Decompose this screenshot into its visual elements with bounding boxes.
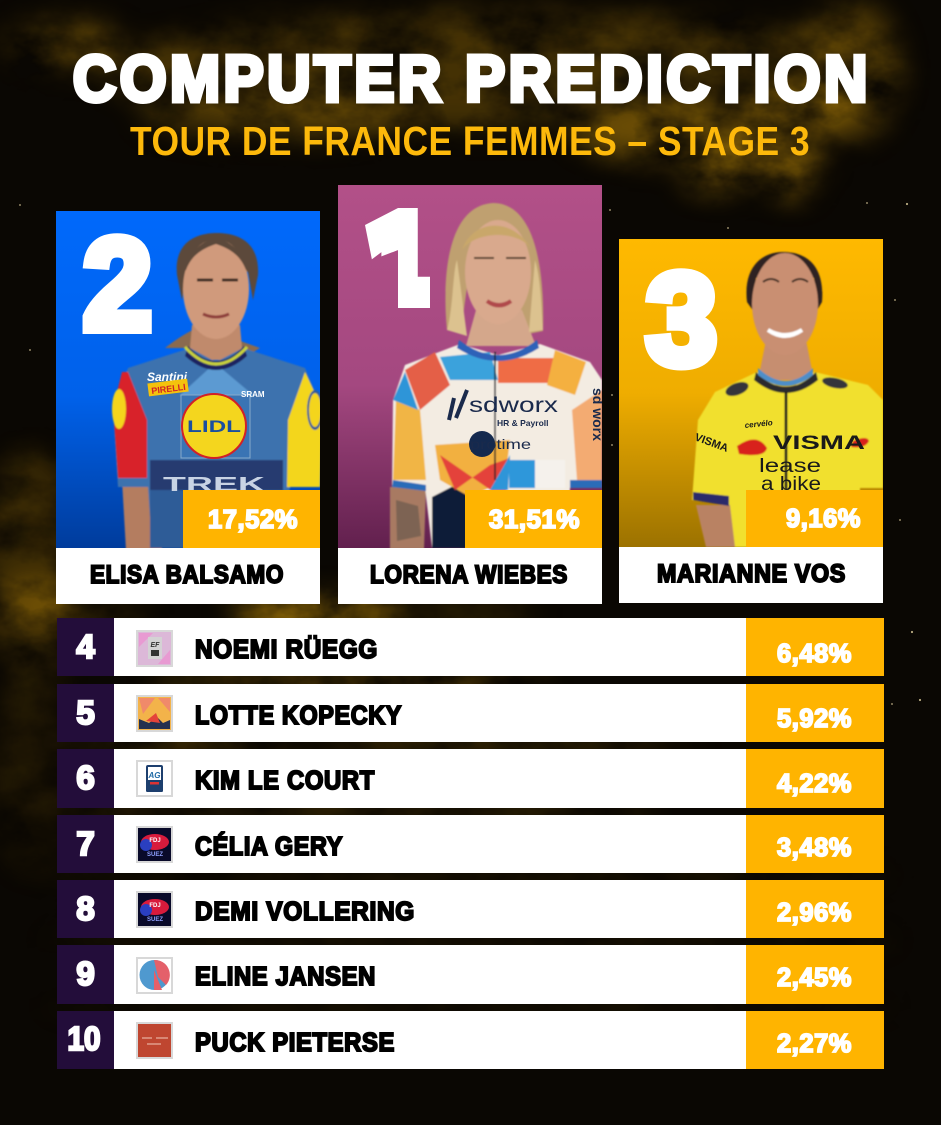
panel: third place <box>619 239 883 603</box>
jersey lettering: PIRELLI <box>151 382 186 396</box>
row 10 <box>57 1011 884 1069</box>
Visma jersey lettering: VISMA <box>773 433 865 454</box>
third place percent: 9,16% <box>786 503 861 533</box>
big number 2: 2 <box>83 211 152 357</box>
Visma jersey lettering <box>696 420 864 490</box>
logo: FDJ Suez: FDJ <box>149 838 161 844</box>
third place backdrop <box>619 239 883 547</box>
logo: FDJ Suez: FDJ <box>149 903 161 909</box>
Visma jersey lettering: cervélo <box>744 418 773 430</box>
Lidl jersey logo <box>181 394 250 458</box>
Lidl jersey logo: LIDL <box>187 417 241 436</box>
logo: FDJ Suez <box>137 892 172 927</box>
row 6: 4,22% <box>777 768 852 798</box>
ranking table <box>57 618 884 1069</box>
row 7: 7 <box>76 825 95 862</box>
big number 1: 1 <box>367 185 427 331</box>
row 5: LOTTE KOPECKY <box>195 702 402 730</box>
logo: FDJ Suez: SUEZ <box>147 852 163 858</box>
third place name: MARIANNE VOS <box>657 560 846 588</box>
row 8: 8 <box>76 890 95 927</box>
second place name: ELISA BALSAMO <box>90 561 284 589</box>
jersey lettering: TREK <box>163 474 266 496</box>
jersey lettering <box>147 370 266 496</box>
row 8: 2,96% <box>777 897 852 927</box>
photo: Lorena Wiebes <box>390 203 606 549</box>
row 5: 5 <box>76 694 95 731</box>
logo: EF: EF <box>151 642 160 649</box>
first place name <box>338 548 602 604</box>
logo: FDJ Suez <box>137 827 172 862</box>
row 6 <box>57 749 884 808</box>
logo: FDJ Suez: SUEZ <box>147 917 163 923</box>
sdworx jersey lettering <box>449 388 606 457</box>
row 10: 10 <box>68 1020 100 1057</box>
row 7: 3,48% <box>777 832 852 862</box>
second place backdrop <box>56 211 320 548</box>
big number 3: 3 <box>646 246 717 392</box>
jersey lettering: SRAM <box>241 390 265 399</box>
third place name <box>619 547 883 603</box>
row 9: ELINE JANSEN <box>195 963 376 991</box>
row 7: CÉLIA GERY <box>195 832 343 861</box>
Visma jersey lettering: VISMA <box>693 432 730 455</box>
photo: Marianne Vos <box>692 252 883 547</box>
row 6: 6 <box>76 759 95 796</box>
panel: second place <box>56 211 323 604</box>
logo: AG <box>137 761 172 796</box>
logo: SD Worx <box>137 696 172 731</box>
row 4 <box>57 618 884 676</box>
row 9: 9 <box>76 955 95 992</box>
logo: EF <box>137 631 172 666</box>
row 5 <box>57 684 884 742</box>
sdworx jersey lettering: protime <box>470 436 531 452</box>
row 5: 5,92% <box>777 703 852 733</box>
row 6: KIM LE COURT <box>195 767 375 795</box>
sdworx jersey lettering: sdworx <box>469 394 559 417</box>
row 9 <box>57 945 884 1004</box>
row 10: 2,27% <box>777 1028 852 1058</box>
first place backdrop <box>338 185 602 548</box>
second place percent: 17,52% <box>208 504 298 534</box>
logo: Fenix <box>137 1023 172 1058</box>
row 4: 4 <box>76 628 95 665</box>
first place percent <box>465 490 602 548</box>
logo: Human Powered <box>137 958 172 993</box>
second place name <box>56 548 320 604</box>
subtitle: TOUR DE FRANCE FEMMES – STAGE 3 <box>130 118 810 164</box>
third place percent <box>746 490 883 547</box>
row 8: DEMI VOLLERING <box>195 898 415 926</box>
row 4: NOEMI RÜEGG <box>195 635 378 664</box>
row 10: PUCK PIETERSE <box>195 1029 395 1057</box>
second place percent <box>183 490 320 548</box>
logo: AG: AG <box>148 771 160 780</box>
panel: first place <box>338 185 606 604</box>
Visma jersey lettering: lease <box>759 456 821 477</box>
sdworx jersey lettering: HR & Payroll <box>497 418 548 428</box>
jersey lettering: Santini <box>147 370 188 384</box>
first place percent: 31,51% <box>489 504 580 534</box>
title: COMPUTER PREDICTION <box>73 42 871 115</box>
sdworx jersey lettering: sd worx <box>590 388 606 441</box>
row 7 <box>57 815 884 873</box>
Visma jersey lettering: a bike <box>761 474 821 495</box>
row 4: 6,48% <box>777 638 852 668</box>
row 8 <box>57 880 884 938</box>
row 9: 2,45% <box>777 962 852 992</box>
first place name: LORENA WIEBES <box>370 561 568 589</box>
photo: Elisa Balsamo <box>112 233 323 550</box>
